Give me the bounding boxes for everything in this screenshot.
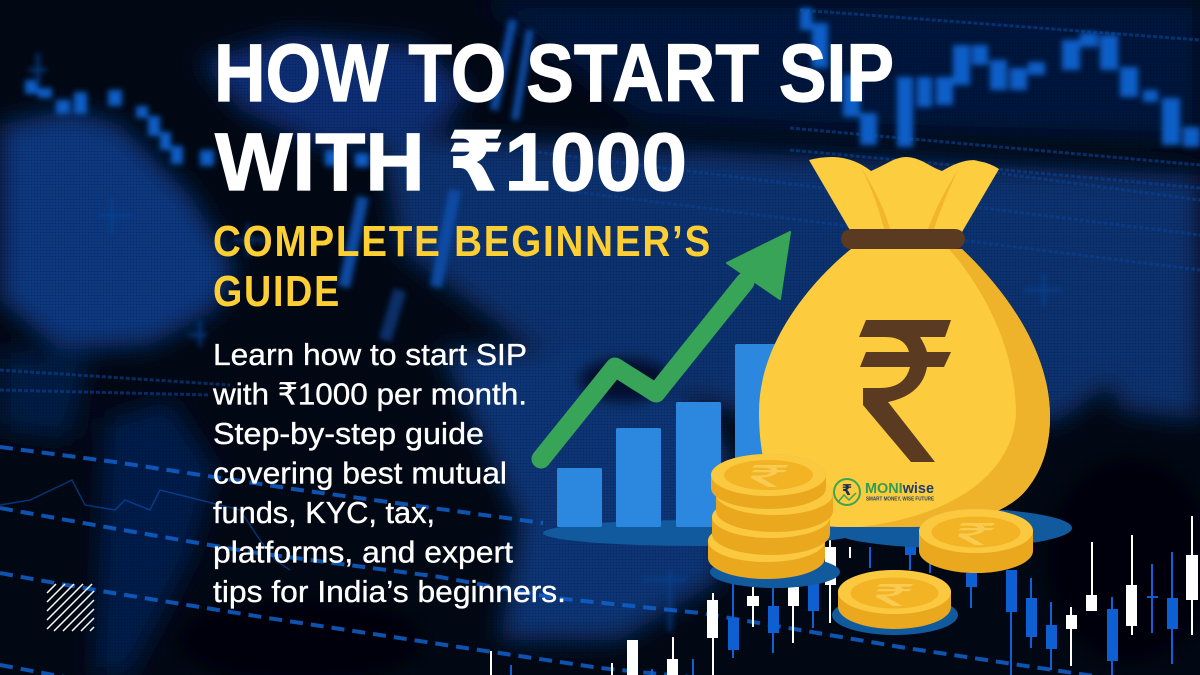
arrow: green growth arrow [541, 232, 790, 459]
illustration shadows [543, 508, 1072, 635]
coin bottom [838, 570, 951, 629]
title: HOW TO START SIP [214, 28, 894, 119]
description text: tips for India’s beginners. [213, 575, 566, 609]
title: WITH ₹1000 [215, 117, 687, 208]
description text: platforms, and expert [213, 536, 514, 570]
logo: MONIwise: SMART MONEY, WISE FUTURE [866, 496, 935, 502]
subtitle: COMPLETE BEGINNER’S [213, 217, 712, 266]
title [214, 28, 894, 208]
coin stack [708, 454, 833, 579]
description text: covering best mutual [213, 456, 507, 490]
description text: Learn how to start SIP [213, 338, 527, 372]
subtitle [213, 217, 712, 316]
logo: MONIwise: MONIwise [865, 481, 934, 497]
bar chart [557, 344, 780, 527]
description text [212, 338, 566, 609]
description text: with ₹1000 per month. [212, 378, 527, 412]
subtitle: GUIDE [213, 267, 341, 316]
decorative hatch square [47, 584, 94, 631]
description text: Step-by-step guide [213, 417, 484, 451]
coin right [919, 509, 1033, 573]
logo: MONIwise [834, 479, 935, 505]
logo: MONIwise: ₹ [842, 482, 852, 499]
candlestick chart along bottom [491, 516, 1198, 675]
description text: funds, KYC, tax, [213, 496, 435, 530]
icon: money bag [759, 157, 1050, 527]
